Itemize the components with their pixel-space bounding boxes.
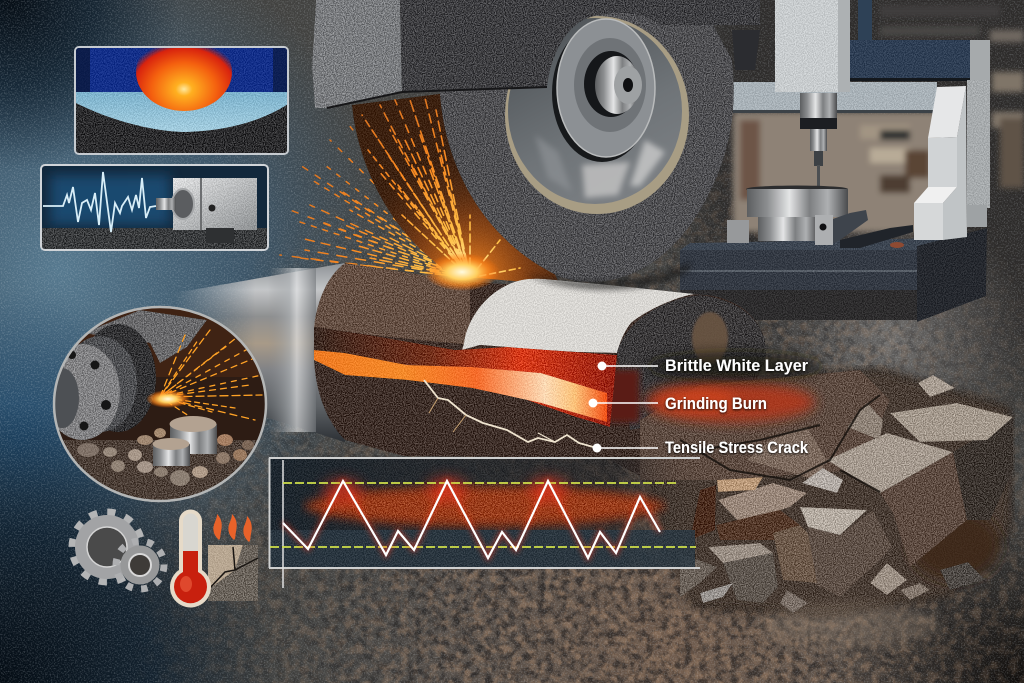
- icon: gears: [73, 513, 164, 589]
- ground base behind rocks: [640, 365, 1015, 620]
- data line: [283, 481, 660, 558]
- wheel face: [440, 0, 734, 282]
- small front rocks: [680, 543, 985, 613]
- disc highlights: [535, 135, 665, 198]
- end cap: [617, 295, 766, 430]
- red glow slab: [640, 370, 890, 480]
- heat waves: [213, 514, 252, 542]
- dark band behind labels: [647, 352, 823, 380]
- icon: cracked heated surface: [208, 514, 258, 601]
- icon: thermometer: [170, 510, 211, 607]
- wheel rim with sparks: [352, 90, 560, 285]
- rock cracks: [680, 395, 880, 492]
- wheel grain: [83, 310, 207, 363]
- callout: brittle white layer: [598, 357, 809, 375]
- white support bracket: [914, 86, 987, 240]
- middle rocks: [690, 477, 892, 597]
- callout: tensile stress crack: Tensile Stress Crack: [665, 439, 809, 457]
- red heat zone: [270, 477, 695, 567]
- metal billets: [152, 416, 217, 466]
- small gear: [116, 541, 164, 589]
- flange: [44, 324, 156, 440]
- waveform: [43, 172, 156, 232]
- callout: grinding burn: [588, 395, 767, 413]
- blurred workshop background: [733, 5, 1024, 232]
- hub disc: [505, 16, 689, 214]
- line chart: residual stress: [269, 458, 700, 588]
- crack: [424, 380, 597, 448]
- grinding wheel: [312, 0, 760, 285]
- rust upper band: [314, 263, 470, 345]
- sparks spray left of wheel: [280, 120, 470, 278]
- chart panel: [270, 459, 700, 568]
- wheel guard: [312, 0, 760, 108]
- steel shaft: [175, 263, 345, 442]
- limit lines: [270, 483, 696, 547]
- sensor machine: [156, 178, 257, 243]
- callout: tensile stress crack: [592, 439, 809, 457]
- cylinder body: [314, 263, 766, 476]
- wheel shadow edge over white layer: [525, 262, 690, 290]
- chart frame: [269, 458, 700, 588]
- machine column and beam: [733, 0, 990, 208]
- inset: acoustic sensor waveform: [41, 165, 268, 250]
- callout: brittle white layer: Brittle White Layer: [665, 357, 809, 375]
- metal ring workpiece: [727, 186, 913, 248]
- callout: grinding burn: Grinding Burn: [665, 395, 767, 413]
- grinding burn band: [314, 327, 617, 427]
- CNC measuring machine: [680, 0, 990, 322]
- spindle probe: [800, 93, 837, 189]
- large gear: [73, 513, 141, 581]
- machine base: [680, 228, 987, 322]
- inset: thermal heat map: [75, 33, 288, 154]
- inset: circular grinding closeup: [44, 307, 266, 502]
- cracked ground and rocks: [640, 365, 1015, 647]
- ground cylinder cross-section: [314, 263, 766, 476]
- spark burst: [160, 330, 262, 420]
- large rock: [747, 375, 1013, 567]
- brittle white layer: [462, 279, 695, 353]
- callout labels: [588, 352, 823, 457]
- rubble: [77, 428, 254, 486]
- spark contact glow: [424, 253, 500, 291]
- clamps: [727, 215, 833, 245]
